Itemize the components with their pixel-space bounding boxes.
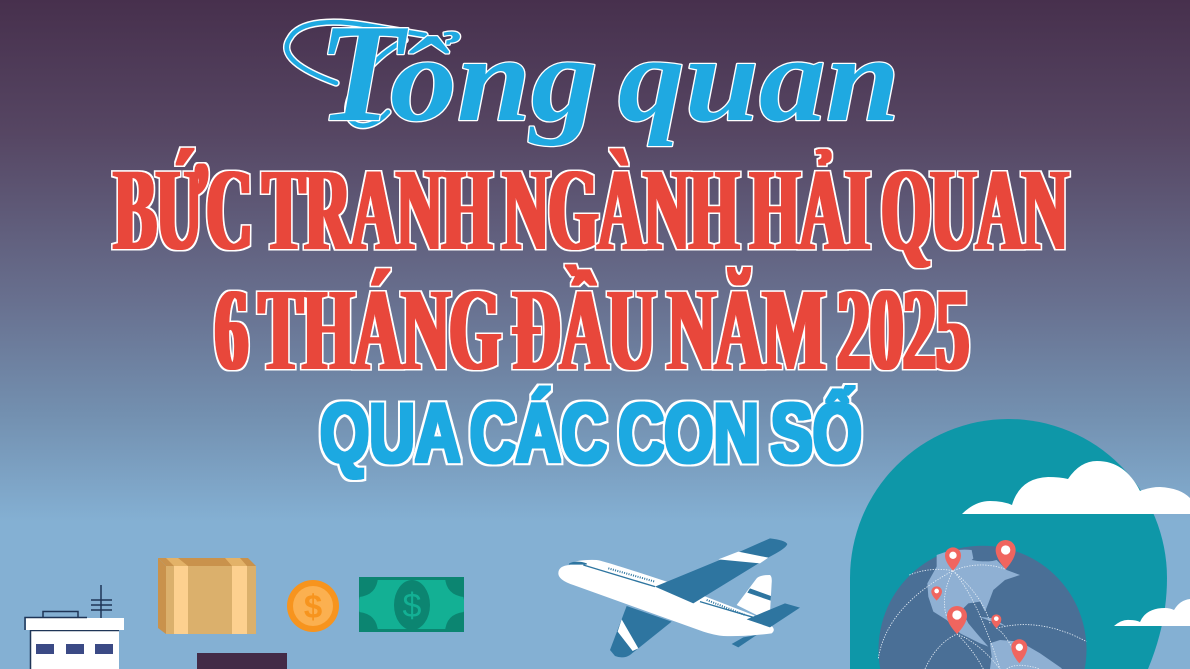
globe with map pins <box>878 540 1087 669</box>
icon: banknote <box>359 577 464 632</box>
icon: ship superstructure <box>25 585 124 669</box>
title: Tổng quan: ổng quan <box>390 12 900 147</box>
icon: coin <box>287 580 339 632</box>
icon: cardboard box <box>158 558 256 634</box>
icon: airplane <box>558 538 800 657</box>
teal circle backdrop <box>850 419 1167 669</box>
cloud: large <box>962 461 1190 514</box>
subheading: qua các con số: QUA CÁC CON SỐ <box>320 386 862 480</box>
title: Tổng quan <box>287 0 900 151</box>
title: Tổng quan: T <box>318 0 409 151</box>
icon: banknote: $ <box>403 587 422 625</box>
icon: coin: $ <box>304 588 322 625</box>
cloud: small <box>1114 599 1190 626</box>
dark block <box>197 653 287 669</box>
